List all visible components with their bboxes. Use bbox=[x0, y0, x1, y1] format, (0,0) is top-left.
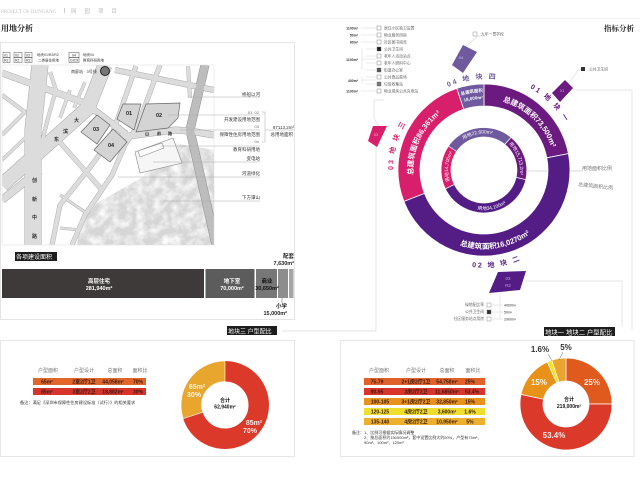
notes: 备注： bbox=[352, 429, 364, 435]
section tag: construction area: 各项建设面积 bbox=[16, 253, 52, 261]
plot labels: 01 bbox=[126, 111, 132, 117]
map annotations: 教育科研用地 bbox=[233, 146, 260, 153]
outer ring labels: 总建筑面积86,361m² bbox=[406, 110, 439, 175]
table: 面积比 bbox=[132, 367, 148, 374]
plot labels: 新 bbox=[32, 196, 37, 203]
table: 4房2厅2卫 bbox=[404, 418, 428, 426]
stacked bar chart: 小学 bbox=[276, 302, 287, 310]
facility list: block 03: 垃圾收集站 bbox=[384, 82, 403, 86]
map annotations: 01 02 bbox=[248, 110, 260, 115]
table: 15% bbox=[465, 400, 476, 406]
table: 44,058m² bbox=[102, 380, 124, 386]
outer ring bbox=[398, 84, 570, 256]
table: 75-79 bbox=[371, 380, 384, 386]
table: 100-105 bbox=[371, 400, 389, 406]
annotation leader lines bbox=[118, 97, 294, 201]
outer ring labels: 总建筑面积 bbox=[461, 88, 483, 96]
block name labels: 03 地 块 三 bbox=[388, 122, 406, 170]
facility list: block 03 bbox=[346, 26, 418, 94]
donut chart: 30% bbox=[187, 392, 202, 399]
map annotations: 03 bbox=[255, 124, 260, 129]
donut chart bbox=[181, 361, 263, 439]
donut labels: 25% bbox=[584, 378, 600, 387]
table: 总面积 bbox=[107, 367, 123, 374]
plot labels: 大 bbox=[74, 117, 79, 124]
outer ring labels: 总建筑面积16,0270m² bbox=[460, 230, 528, 250]
facility list: block 03: 社区图书阅览 bbox=[384, 40, 407, 44]
legend: 地块04 bbox=[83, 52, 94, 57]
callout: block 03: 03 bbox=[374, 132, 379, 137]
plot labels: 滨 bbox=[63, 128, 68, 135]
legend: 01 bbox=[4, 54, 8, 58]
map annotations: 87113.2m² bbox=[273, 125, 294, 130]
stacked bar chart: 商业 bbox=[261, 277, 273, 285]
donut labels: 5% bbox=[560, 343, 572, 352]
stacked bar chart bbox=[2, 252, 294, 317]
outer ring labels: 18,000m² bbox=[464, 96, 483, 102]
donut labels: 219,000m² bbox=[557, 404, 581, 410]
map annotations: 开发建设用地范围 bbox=[224, 116, 260, 123]
table: 54,750m² bbox=[436, 380, 458, 386]
road fill bbox=[2, 65, 216, 245]
block name labels bbox=[388, 73, 568, 268]
map annotations: 保障性住房用地范围 bbox=[220, 131, 260, 138]
table: 户型设计 bbox=[74, 367, 94, 374]
facility list: block 03: 老年人照料中心 bbox=[384, 60, 411, 66]
outer ring labels bbox=[406, 88, 556, 250]
plot labels: 路 bbox=[32, 233, 37, 240]
plot labels: 前 bbox=[157, 130, 161, 136]
inner ring labels: 用地22,600m² bbox=[462, 130, 493, 140]
table: 2+1房2厅1卫 bbox=[401, 378, 431, 386]
table: 1.6% bbox=[464, 410, 476, 416]
inner ring labels bbox=[444, 130, 524, 210]
map annotations: 变电站 bbox=[246, 155, 260, 162]
map annotations: 河道绿化 bbox=[242, 170, 260, 177]
donut chart: 合计 bbox=[220, 397, 230, 404]
stacked bar chart: 281,940m² bbox=[86, 285, 112, 292]
facility: school bbox=[473, 32, 504, 36]
ring chart: total floor area and land area bbox=[388, 73, 570, 268]
legend: 03 bbox=[26, 54, 30, 58]
facility list: block 02: 2900m² bbox=[504, 318, 517, 322]
callout: block 02: 03 bbox=[505, 276, 511, 281]
legend: 04 bbox=[72, 54, 76, 58]
plot labels: 创 bbox=[32, 177, 37, 184]
heading: indicator analysis: 指标分析 bbox=[604, 23, 634, 33]
facility list: block 03: 1100m² bbox=[346, 58, 359, 62]
table: 11,6850m² bbox=[435, 390, 459, 396]
facility list: block 03: 60m² bbox=[350, 40, 359, 44]
map annotations: 桥船以河 bbox=[242, 91, 260, 98]
donut chart: 70% bbox=[243, 428, 258, 435]
donut chart bbox=[520, 358, 612, 450]
stacked bar chart: 15,000m² bbox=[263, 310, 287, 317]
table: 3+1房2厅2卫 bbox=[401, 398, 431, 406]
facility list: block 03: 老年人活动站点 bbox=[384, 54, 411, 58]
table: 32,850m² bbox=[436, 400, 458, 406]
hill area bbox=[77, 143, 214, 245]
callout: block 02: R2 bbox=[505, 283, 511, 288]
table: 4房2厅2卫 bbox=[404, 408, 428, 416]
donut labels: 15% bbox=[531, 378, 547, 387]
facility list: block 02: 50m² bbox=[504, 310, 513, 314]
ring legend: land ratio and floor area ratio: 总建筑面积比例 bbox=[578, 181, 613, 192]
table: 120-125 bbox=[371, 410, 389, 416]
table: 90-95 bbox=[371, 390, 384, 396]
map annotations bbox=[220, 91, 294, 201]
table bbox=[364, 367, 485, 426]
legend: GIC9 bbox=[70, 58, 78, 62]
inner ring labels: 用地15,713.2m² bbox=[508, 142, 524, 175]
stacked bar chart: 高层住宅 bbox=[88, 277, 110, 285]
panel: block 1 and 2 unit mix bbox=[340, 340, 634, 456]
notes: 2、按总面积约150000m²，套中设置比例大约50%，户型有75m²、 bbox=[364, 434, 481, 440]
outer ring labels: 总建筑面积73,500m² bbox=[503, 96, 556, 147]
header line: 网园项目 bbox=[71, 8, 125, 15]
site map bbox=[2, 65, 216, 245]
facility list: block 03: 街道办公室 bbox=[384, 68, 403, 72]
facility: school: 九年一贯学校 bbox=[481, 32, 504, 36]
table: 2室2厅1卫 bbox=[72, 378, 96, 386]
table: 53.4% bbox=[465, 390, 480, 396]
notes: 1、比例可根据实际情况调整 bbox=[364, 429, 414, 435]
table: 3房2厅2卫 bbox=[404, 388, 428, 396]
stacked bar chart: 配套 bbox=[283, 252, 294, 260]
tag: block 1 and 2 unit mix: 地块一 地块二 户型配比 bbox=[545, 328, 613, 336]
map annotations: 总用地面积 bbox=[270, 131, 293, 138]
table: 户型面积 bbox=[38, 367, 58, 374]
map annotations: 下方谭山 bbox=[242, 194, 260, 201]
facility list: block 03: 400m² bbox=[348, 79, 359, 83]
plots 01 to 04 bbox=[81, 103, 180, 162]
plot labels: 03 bbox=[93, 127, 99, 133]
facility: public toilet: 公共卫生间 bbox=[589, 66, 608, 72]
block name labels: 02 地 块 二 bbox=[472, 256, 520, 268]
donut labels: 53.4% bbox=[543, 431, 565, 440]
header line bbox=[0, 8, 640, 19]
callout: block 02 bbox=[489, 271, 526, 293]
callout: block 03 bbox=[368, 126, 387, 147]
table: 5% bbox=[466, 420, 474, 426]
donut chart: 85m² bbox=[246, 420, 263, 427]
plot labels: 东 bbox=[54, 136, 59, 143]
callout: block 04: 04 bbox=[459, 55, 464, 60]
facility list: block 03: 公共卫生间 bbox=[384, 46, 403, 52]
callout: block 01: 01 bbox=[560, 88, 565, 93]
facility list: block 02: 绿地配比率 bbox=[465, 302, 484, 307]
panel: block 3 unit mix bbox=[0, 340, 294, 456]
table: 65m² bbox=[41, 380, 53, 386]
callout: block 04 bbox=[452, 45, 477, 73]
panel: land use bbox=[0, 42, 294, 320]
donut labels: 1.6% bbox=[531, 345, 549, 354]
table: 户型设计 bbox=[406, 367, 426, 374]
stacked bar chart: 30,650m² bbox=[255, 285, 279, 292]
plot labels: 中 bbox=[32, 214, 37, 221]
plot labels: 路 bbox=[168, 130, 172, 136]
plot labels bbox=[32, 111, 172, 240]
table: 85m² bbox=[41, 390, 53, 396]
callout: block 01 bbox=[552, 80, 573, 102]
facility list: block 03: 1100m² bbox=[346, 90, 359, 94]
stacked bar chart: 7,630m² bbox=[274, 260, 294, 267]
legend: R2 bbox=[4, 58, 9, 62]
table: 户型面积 bbox=[369, 367, 389, 374]
notes: 90m²、100m²、120m² bbox=[364, 440, 404, 445]
ring legend: land ratio and floor area ratio: 用地面积比例 bbox=[582, 165, 612, 172]
table: 3,600m² bbox=[438, 410, 457, 416]
table: 30% bbox=[133, 390, 144, 396]
inner ring labels: 用地14,700m² bbox=[444, 151, 452, 182]
plot labels: 04 bbox=[108, 143, 115, 149]
metro station marker bbox=[71, 66, 110, 76]
road casing bbox=[2, 65, 216, 245]
table bbox=[33, 367, 148, 396]
note: 备注：满足《深圳市保障性住房建设标准（试行）》的相关要求 bbox=[20, 399, 136, 406]
plot labels: 02 bbox=[156, 113, 162, 119]
school site bbox=[135, 138, 182, 173]
facility list: block 03: 居住小区独卫设置 bbox=[384, 26, 415, 30]
donut chart: 65m² bbox=[189, 384, 206, 391]
facility list: block 02 bbox=[454, 293, 517, 322]
header line: PROJECT OF HUNGANG bbox=[1, 10, 57, 15]
metro station marker: 南屏站 · 3号线 bbox=[71, 68, 97, 74]
legend: R2 bbox=[15, 58, 20, 62]
donut labels: 合计 bbox=[564, 396, 574, 403]
table: 3室2厅2卫 bbox=[72, 388, 96, 396]
legend: 教育科研用地 bbox=[83, 58, 104, 62]
connector lines bbox=[282, 36, 632, 331]
table: 总面积 bbox=[439, 367, 455, 374]
legend: 二类居住用地 bbox=[38, 58, 59, 62]
donut labels bbox=[531, 343, 600, 440]
facility list: block 02: 4900m² bbox=[504, 304, 517, 308]
legend bbox=[3, 52, 104, 62]
table: 25% bbox=[465, 380, 476, 386]
legend: 02 bbox=[15, 54, 19, 58]
block name labels: 01 地 块 一 bbox=[530, 84, 568, 120]
tag: block 3 unit mix: 地块三 户型配比 bbox=[228, 328, 272, 336]
facility list: block 03: 公共食品菜场 bbox=[384, 74, 407, 80]
table: 面积比 bbox=[465, 367, 481, 374]
facility: public toilet bbox=[581, 66, 608, 72]
stacked bar chart: 地下室 bbox=[224, 277, 241, 285]
inner ring bbox=[441, 127, 527, 213]
stacked bar chart: 70,000m² bbox=[220, 285, 244, 292]
table: 10,950m² bbox=[436, 420, 458, 426]
plot labels: 山 bbox=[145, 130, 149, 136]
facility list: block 03: 物业服务用房 bbox=[384, 32, 407, 38]
heading: land use analysis: 用地分析 bbox=[1, 23, 33, 33]
facility list: block 03: 50m² bbox=[350, 34, 359, 38]
table: 18,882m² bbox=[102, 390, 124, 396]
donut chart: 62,940m² bbox=[214, 404, 236, 410]
inner ring labels: 用地34,100m² bbox=[478, 200, 506, 210]
legend: R2 bbox=[26, 58, 31, 62]
legend: 地块01/R2/R2 bbox=[37, 52, 59, 57]
notes bbox=[352, 429, 481, 445]
map annotations: 04 bbox=[255, 139, 260, 144]
block name labels: 04 地 块 四 bbox=[446, 73, 496, 86]
facility list: block 03: 1100m² bbox=[346, 26, 359, 30]
ring legend: land ratio and floor area ratio bbox=[578, 165, 613, 192]
table: 135-140 bbox=[371, 420, 389, 426]
table: 70% bbox=[133, 380, 144, 386]
tag: block 3 unit mix bbox=[227, 326, 277, 336]
facility list: block 02: 公共卫生间 bbox=[465, 309, 484, 314]
facility list: block 03: 物业用房公共充电站 bbox=[384, 88, 418, 94]
section tag: construction area bbox=[15, 252, 57, 261]
facility list: block 02: 社区服务站点用房 bbox=[454, 316, 484, 321]
